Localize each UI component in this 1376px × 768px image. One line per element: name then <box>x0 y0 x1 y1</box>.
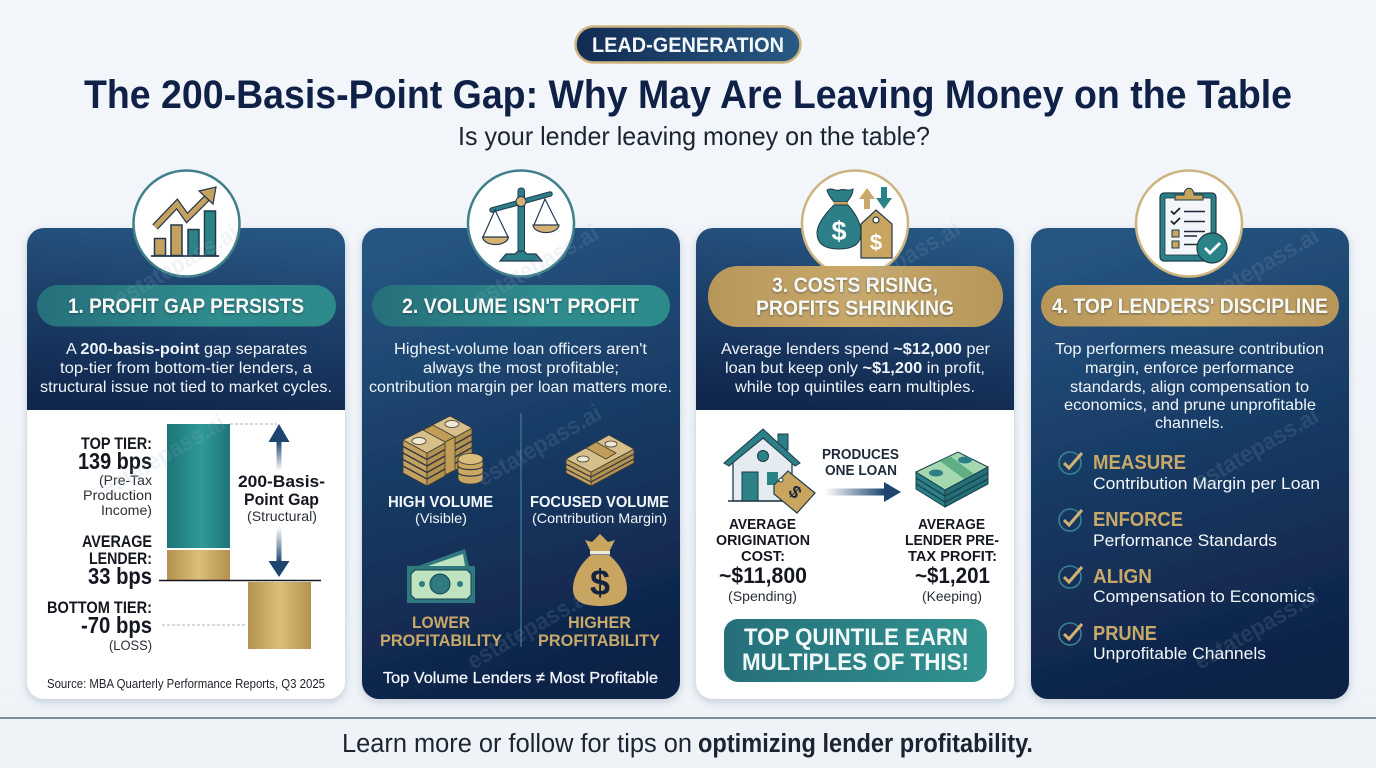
bar chart: tiers <box>159 424 321 649</box>
focused volume label: FOCUSED VOLUME <box>530 494 669 511</box>
lower profitability label: PROFITABILITY <box>380 631 503 650</box>
item: prune: PRUNE <box>1093 623 1157 645</box>
summary text <box>721 341 991 396</box>
summary text: always the most profitable; <box>423 360 619 377</box>
tier labels <box>47 434 152 653</box>
heading pill: PROFITS SHRINKING <box>756 296 954 320</box>
summary text: structural issue not tied to market cycles. <box>40 379 332 396</box>
callout: top quintile: MULTIPLES OF THIS! <box>742 649 969 676</box>
lower profitability label: LOWER <box>412 613 470 632</box>
watermarks: estatepass.ai <box>462 582 596 675</box>
tier labels: 33 bps <box>88 563 152 589</box>
tier labels: (LOSS) <box>109 637 152 653</box>
item: align <box>1059 566 1315 606</box>
origination cost figures: ORIGINATION <box>716 533 810 549</box>
watermarks: estatepass.ai <box>1190 222 1323 315</box>
summary text: Highest-volume loan officers aren't <box>394 341 648 358</box>
summary text <box>369 341 672 396</box>
summary text <box>1055 341 1324 432</box>
card background <box>27 228 345 699</box>
tier labels: (Pre-Tax <box>99 472 152 488</box>
badge: lead-generation <box>576 26 800 62</box>
icon: house with price tag <box>724 429 815 513</box>
footer call to action: Learn more or follow for tips on <box>342 730 692 758</box>
higher profitability label: HIGHER <box>568 613 631 632</box>
item: measure <box>1059 452 1320 493</box>
source note: Source: MBA Quarterly Performance Reports, Q3 2025 <box>47 677 325 691</box>
tier labels: LENDER: <box>89 550 152 568</box>
tier labels: -70 bps <box>81 612 152 638</box>
footer call to action <box>342 730 1033 758</box>
summary text: margin, enforce performance <box>1085 360 1294 377</box>
item: prune: Unprofitable Channels <box>1093 644 1266 663</box>
origination cost figures: ~$11,800 <box>719 563 807 588</box>
item: prune <box>1059 623 1266 663</box>
item: enforce <box>1059 509 1277 550</box>
summary text: standards, align compensation to <box>1070 379 1309 396</box>
item: align: ALIGN <box>1093 566 1152 588</box>
item: measure: MEASURE <box>1093 452 1186 474</box>
summary text: channels. <box>1155 415 1224 432</box>
summary text: while top quintiles earn multiples. <box>734 379 975 396</box>
card background <box>1031 228 1349 699</box>
summary text: Average lenders spend ~$12,000 per <box>721 341 991 358</box>
arrow: cost to profit <box>825 482 901 502</box>
tier labels: Production <box>83 487 152 503</box>
heading pill: 4. TOP LENDERS' DISCIPLINE <box>1052 294 1328 318</box>
icon: money bag <box>573 534 627 606</box>
pre-tax profit figures: AVERAGE <box>918 517 985 533</box>
tier labels: 139 bps <box>78 448 152 474</box>
item: enforce: ENFORCE <box>1093 509 1183 531</box>
heading pill <box>708 266 1003 327</box>
origination cost figures: AVERAGE <box>729 517 796 533</box>
summary text: contribution margin per loan matters more. <box>369 379 672 396</box>
panel 2: volume isn't profit <box>362 170 680 699</box>
icon: rising chart <box>134 170 240 276</box>
lower profitability label <box>380 613 503 650</box>
card background <box>696 228 1014 699</box>
heading pill <box>1041 285 1339 326</box>
watermarks <box>96 215 1323 675</box>
icon: clipboard checklist <box>1136 170 1242 276</box>
focused volume label: (Contribution Margin) <box>532 510 667 526</box>
panel 3: costs rising, profits shrinking <box>696 170 1014 699</box>
heading pill: 3. COSTS RISING, <box>772 273 938 297</box>
gap callout with arrows: Point Gap <box>244 490 319 509</box>
callout: top quintile: TOP QUINTILE EARN <box>744 624 968 651</box>
heading pill <box>37 285 336 326</box>
watermarks: estatepass.ai <box>470 219 603 312</box>
summary text: top-tier from bottom-tier lenders, a <box>60 360 312 377</box>
pre-tax profit figures: LENDER PRE- <box>905 533 999 549</box>
item: align: Compensation to Economics <box>1093 587 1315 606</box>
item: measure: Contribution Margin per Loan <box>1093 474 1320 493</box>
heading pill: 1. PROFIT GAP PERSISTS <box>68 294 304 318</box>
summary text: A 200-basis-point gap separates <box>66 341 307 358</box>
tier labels: TOP TIER: <box>81 434 152 453</box>
icon: money bag: $ <box>590 562 610 603</box>
summary text <box>40 341 332 396</box>
tier labels: BOTTOM TIER: <box>47 599 152 617</box>
icon: money bag, price tag, arrows <box>802 170 908 276</box>
icon: large money stack with coins <box>403 416 483 486</box>
origination cost figures <box>716 517 810 604</box>
watermarks: estatepass.ai <box>472 399 606 492</box>
summary text: loan but keep only ~$1,200 in profit, <box>725 360 985 377</box>
watermarks: estatepass.ai <box>1190 582 1323 675</box>
watermarks: estatepass.ai <box>96 409 230 502</box>
badge: lead-generation: LEAD-GENERATION <box>592 34 784 57</box>
takeaway text: Top Volume Lenders ≠ Most Profitable <box>383 670 658 687</box>
higher profitability label <box>538 613 661 650</box>
icon: money bag, price tag, arrows: $ <box>831 216 847 246</box>
gap callout with arrows: 200-Basis- <box>238 472 325 491</box>
high volume label: (Visible) <box>415 510 467 526</box>
arrow label <box>822 447 899 479</box>
item: enforce: Performance Standards <box>1093 531 1277 550</box>
pre-tax profit figures <box>905 517 999 604</box>
heading pill <box>372 285 670 326</box>
icon: small money stack <box>566 435 634 486</box>
panel 4: top lenders' discipline <box>1031 170 1349 699</box>
icon: teal money stack <box>916 452 988 507</box>
tier labels: Income) <box>101 502 152 518</box>
watermarks: estatepass.ai <box>1190 402 1323 495</box>
focused volume label <box>530 494 669 526</box>
high volume label: HIGH VOLUME <box>388 494 493 511</box>
arrow label: ONE LOAN <box>825 463 897 479</box>
callout: top quintile <box>724 619 987 682</box>
watermarks: estatepass.ai <box>832 215 965 308</box>
pre-tax profit figures: ~$1,201 <box>915 563 990 588</box>
icon: house with price tag: $ <box>784 481 806 503</box>
heading pill: 2. VOLUME ISN'T PROFIT <box>402 294 639 318</box>
icon: money bag, price tag, arrows: $ <box>870 230 882 255</box>
panel 1: profit gap persists <box>27 170 345 699</box>
title: The 200-Basis-Point Gap: Why May Are Leaving Money on the Table <box>84 73 1292 117</box>
tier labels: AVERAGE <box>82 533 152 551</box>
summary text: economics, and prune unprofitable <box>1064 397 1316 414</box>
watermarks: estatepass.ai <box>110 219 243 312</box>
footer call to action: optimizing lender profitability. <box>698 730 1033 758</box>
gap callout with arrows <box>238 424 325 577</box>
higher profitability label: PROFITABILITY <box>538 631 661 650</box>
pre-tax profit figures: (Keeping) <box>922 588 982 604</box>
origination cost figures: (Spending) <box>728 588 797 604</box>
icon: balance scale <box>468 170 574 276</box>
gap callout with arrows: (Structural) <box>247 508 317 524</box>
arrow label: PRODUCES <box>822 447 899 463</box>
icon: cash notes <box>407 549 475 603</box>
summary text: Top performers measure contribution <box>1055 341 1324 358</box>
origination cost figures: COST: <box>741 549 785 565</box>
pre-tax profit figures: TAX PROFIT: <box>908 549 997 565</box>
subtitle: Is your lender leaving money on the table? <box>458 121 930 151</box>
card background <box>362 228 680 699</box>
high volume label <box>388 494 493 526</box>
